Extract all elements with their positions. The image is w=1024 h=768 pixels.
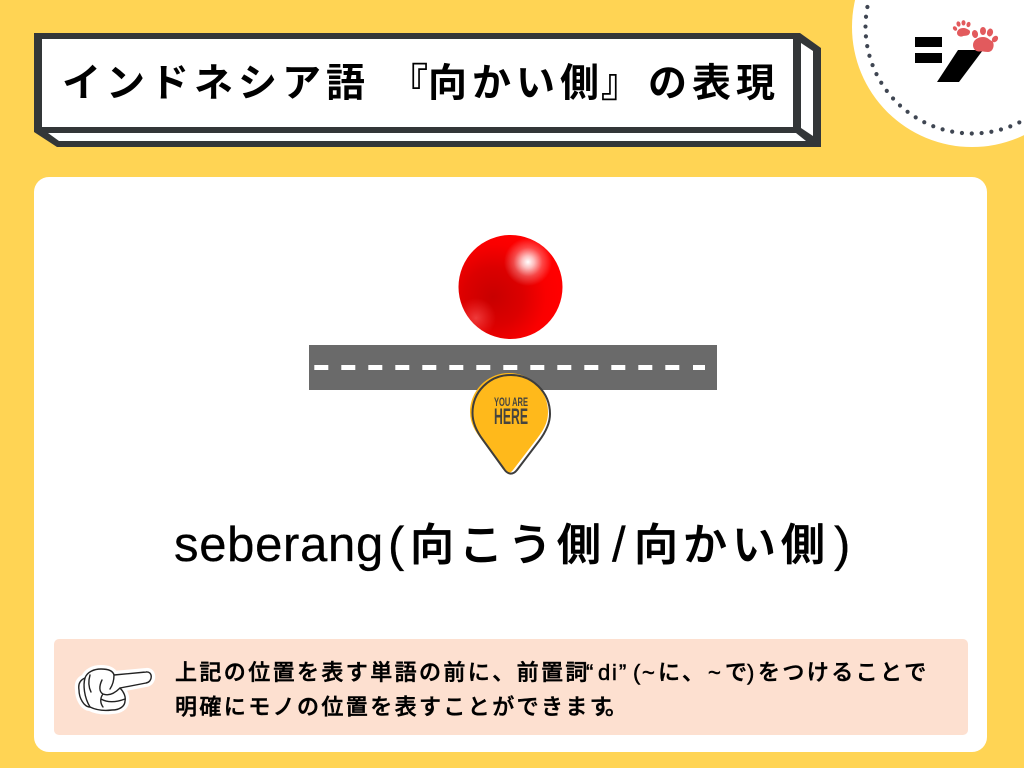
title banner <box>34 33 821 147</box>
heading: seberang <box>174 509 850 573</box>
heading: seberang: seberang <box>174 518 384 572</box>
title text: インドネシア語『向かい側』の表現 <box>62 52 775 108</box>
logo mark <box>915 37 983 82</box>
pin label: HERE <box>494 404 528 429</box>
icon: paw prints <box>952 20 999 52</box>
panel: main content <box>34 177 987 752</box>
pin label <box>494 395 528 429</box>
callout <box>54 639 968 735</box>
icon: red ball <box>458 235 562 339</box>
callout text <box>175 660 926 720</box>
icon: you are here pin <box>470 373 550 474</box>
corner logo badge <box>852 0 1024 147</box>
pin label: YOU ARE <box>494 395 528 409</box>
heading: seberang: / <box>612 518 626 572</box>
callout text: 上記の位置を表す単語の前に、前置詞“di”(~に、~で)をつけることで <box>175 660 926 685</box>
heading: seberang: 向こう側 <box>410 509 601 573</box>
icon: pointing hand <box>79 669 151 710</box>
heading: seberang: ) <box>834 518 850 572</box>
heading: seberang: ( <box>388 518 405 572</box>
callout text: 明確にモノの位置を表すことができます。 <box>175 694 627 720</box>
heading: seberang: 向かい側 <box>634 509 825 573</box>
road <box>309 345 717 390</box>
